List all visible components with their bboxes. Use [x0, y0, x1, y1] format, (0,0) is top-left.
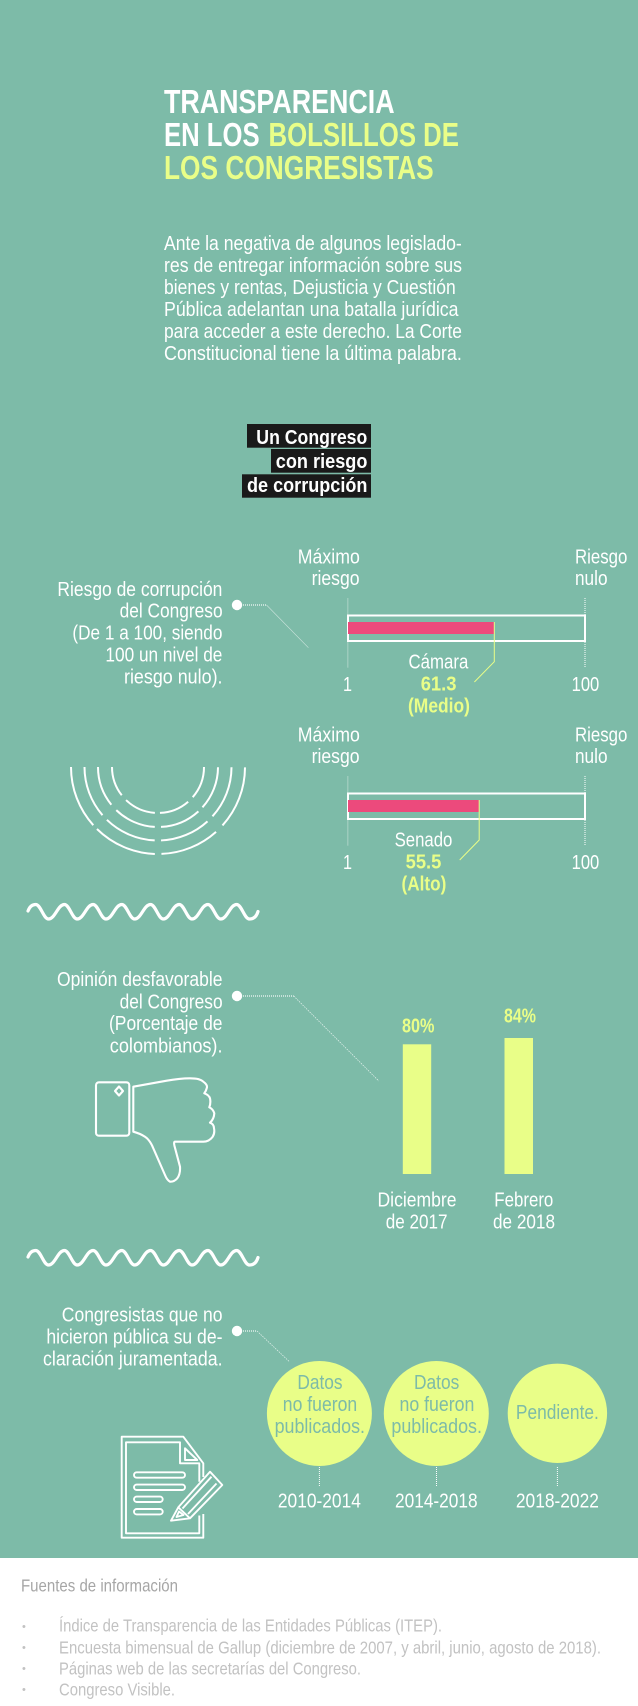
title: BOLSILLOS DE — [268, 116, 459, 153]
divider wave — [28, 1250, 258, 1265]
circle: 2010-2014: 2010-2014 — [278, 1490, 361, 1513]
chart: Senado risk bar: nulo — [575, 745, 608, 768]
circle: 2018-2022: Pendiente. — [516, 1401, 599, 1424]
label: corruption risk — [57, 578, 223, 688]
chart: Cámara risk bar: riesgo — [312, 567, 360, 590]
connector: unfavorable opinion — [232, 991, 379, 1081]
chart: Cámara risk bar: Máximo — [298, 545, 360, 568]
divider wave — [28, 904, 258, 919]
intro paragraph: Ante la negativa de algunos legislado- — [164, 232, 462, 255]
circle: 2014-2018: Datos — [414, 1371, 459, 1394]
chart: Cámara risk bar: 100 — [572, 673, 599, 696]
label: undisclosed declarations: claración juramentada. — [43, 1348, 222, 1371]
title: LOS CONGRESISTAS — [164, 149, 434, 186]
label: unfavorable opinion: (Porcentaje de — [109, 1012, 222, 1035]
connector: undisclosed declarations — [232, 1326, 290, 1362]
intro paragraph: bienes y rentas, Dejusticia y Cuestión — [164, 276, 456, 299]
section heading: Un Congreso — [256, 426, 367, 449]
chart: Cámara risk bar — [298, 545, 627, 718]
circle: 2018-2022 — [508, 1364, 607, 1513]
section heading: con riesgo — [276, 450, 367, 473]
circle: 2014-2018: publicados. — [391, 1415, 482, 1438]
circle: 2010-2014: Datos — [297, 1371, 343, 1394]
circle: 2018-2022: 2018-2022 — [516, 1490, 599, 1513]
chart: Cámara risk bar: 1 — [343, 673, 352, 696]
panel: sources — [0, 1558, 638, 1706]
chart: Senado risk bar: (Alto) — [402, 872, 446, 896]
circle: 2014-2018: 2014-2018 — [395, 1490, 478, 1513]
intro paragraph — [164, 232, 462, 365]
chart: Cámara risk bar: Cámara — [408, 650, 469, 673]
intro paragraph: Pública adelantan una batalla jurídica — [164, 298, 459, 321]
title: EN LOS — [164, 116, 260, 153]
label: unfavorable opinion: Opinión desfavorable — [57, 968, 222, 991]
label: corruption risk: riesgo nulo). — [124, 666, 222, 688]
chart: Cámara risk bar: 61.3 — [421, 673, 456, 696]
label: corruption risk: (De 1 a 100, siendo — [72, 622, 222, 644]
chart: opinion bars: de 2018 — [493, 1211, 555, 1234]
circle: 2010-2014: no fueron — [283, 1393, 357, 1416]
icon: thumbs down — [96, 1078, 214, 1182]
chart: Senado risk bar: 55.5 — [406, 851, 441, 874]
chart: opinion bars: Diciembre — [378, 1189, 456, 1212]
connector: corruption risk — [232, 600, 308, 648]
chart: Cámara risk bar: Riesgo — [575, 545, 627, 568]
label: corruption risk: 100 un nivel de — [105, 644, 222, 666]
panel: sources: Fuentes de información — [21, 1576, 178, 1596]
chart: Senado risk bar — [298, 723, 627, 896]
chart: Senado risk bar: Riesgo — [575, 723, 627, 746]
label: corruption risk: Riesgo de corrupción — [57, 578, 222, 601]
label: undisclosed declarations: Congresistas que no — [62, 1304, 222, 1327]
panel: sources: Páginas web de las secretarías del Congreso. — [59, 1658, 361, 1678]
panel: sources: • — [22, 1642, 26, 1654]
chart: Senado risk bar: Senado — [395, 828, 452, 851]
intro paragraph: Constitucional tiene la última palabra. — [164, 342, 462, 365]
icon: document and pencil — [122, 1437, 222, 1538]
circle: 2014-2018: no fueron — [400, 1393, 474, 1416]
section heading: de corrupción — [247, 474, 367, 497]
title — [164, 83, 459, 186]
intro paragraph: res de entregar información sobre sus — [164, 254, 462, 277]
chart: Senado risk bar: 100 — [572, 851, 599, 874]
chart: opinion bars — [378, 1005, 555, 1234]
panel: sources: • — [22, 1684, 26, 1696]
chart: opinion bars: de 2017 — [386, 1211, 448, 1234]
circle: 2010-2014 — [267, 1361, 372, 1513]
circle: 2014-2018 — [384, 1361, 489, 1513]
chart: opinion bars: Febrero — [494, 1189, 553, 1212]
section heading — [242, 424, 371, 498]
icon: hemicycle — [71, 767, 245, 854]
chart: Senado risk bar: 1 — [343, 851, 352, 874]
label: undisclosed declarations — [43, 1304, 222, 1371]
label: unfavorable opinion — [57, 968, 223, 1057]
panel: sources: • — [22, 1621, 26, 1633]
chart: Senado risk bar: Máximo — [298, 723, 360, 746]
chart: Senado risk bar: riesgo — [312, 745, 360, 768]
chart: Cámara risk bar: (Medio) — [408, 694, 470, 718]
label: unfavorable opinion: del Congreso — [120, 990, 223, 1013]
circle: 2010-2014: publicados. — [275, 1415, 365, 1438]
title: TRANSPARENCIA — [164, 83, 395, 120]
label: unfavorable opinion: colombianos). — [110, 1034, 222, 1057]
panel: sources: • — [22, 1663, 26, 1675]
panel: sources: Congreso Visible. — [59, 1680, 175, 1700]
chart: Cámara risk bar: nulo — [575, 567, 608, 590]
chart: opinion bars: 84% — [504, 1005, 536, 1028]
label: undisclosed declarations: hicieron pública su de- — [46, 1326, 223, 1348]
panel: sources: Índice de Transparencia de las Entidades Públicas (ITEP). — [59, 1616, 442, 1636]
label: corruption risk: del Congreso — [120, 600, 223, 622]
chart: opinion bars: 80% — [402, 1015, 434, 1038]
intro paragraph: para acceder a este derecho. La Corte — [164, 320, 462, 343]
